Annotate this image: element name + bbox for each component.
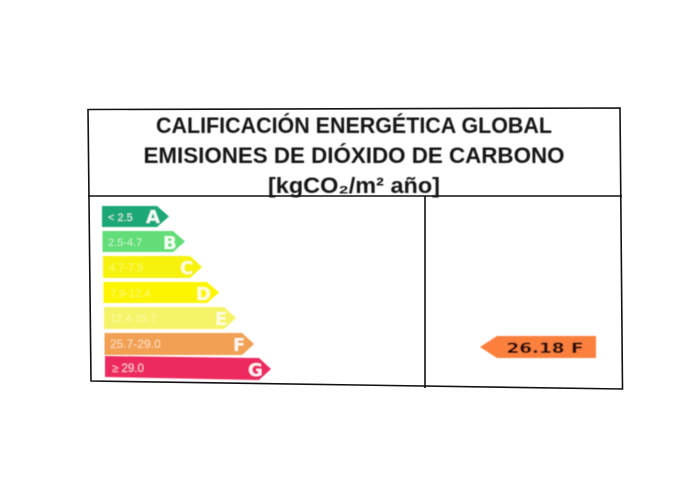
band F: F [233,335,245,356]
title: EMISIONES DE DIÓXIDO DE CARBONO [144,143,564,168]
band D: 7.9-12.4 [110,288,150,300]
band G [105,356,271,381]
band C: 4.7-7.9 [109,262,143,274]
band F: 25.7-29.0 [110,337,161,351]
result marker: 26.18 F: 26.18 F [506,341,584,357]
band G: G [248,360,263,381]
band E: 12.4-25.7 [110,313,156,325]
band E [104,307,236,330]
result marker: 26.18 F [480,336,596,358]
band E: E [215,309,227,330]
band A [102,206,169,228]
band D [104,282,219,305]
title: [kgCO₂/m² año] [268,173,440,198]
title: CALIFICACIÓN ENERGÉTICA GLOBAL [156,113,552,138]
band B: 2.5-4.7 [108,237,142,249]
outer table frame [88,108,622,389]
band C [103,256,202,279]
band B: B [163,233,177,254]
band A: < 2.5 [108,212,133,224]
band G: ≥ 29.0 [112,363,144,375]
band F [104,333,254,356]
rating scale [102,206,271,381]
band B [102,231,185,254]
title [144,113,564,198]
band C: C [180,258,193,279]
band A: A [146,207,160,228]
band D: D [196,284,211,305]
